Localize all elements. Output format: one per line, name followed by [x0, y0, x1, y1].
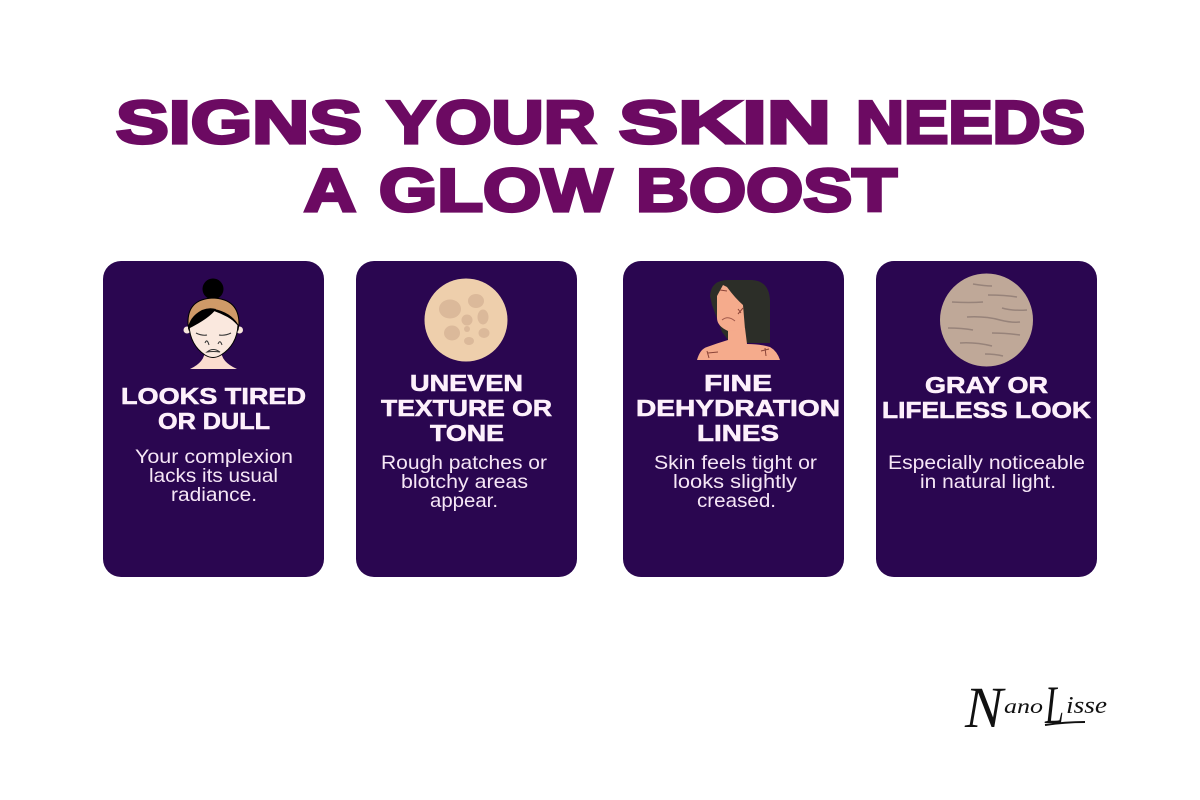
- title: [116, 89, 1085, 224]
- text block: [654, 452, 818, 512]
- heading: LIFELESS LOOK: [882, 397, 1091, 423]
- logo: NanoLisse signature: [964, 675, 1107, 740]
- heading: GRAY OR: [925, 372, 1048, 398]
- title: A: [304, 157, 356, 224]
- text block: [381, 452, 548, 512]
- title: NEEDS: [856, 89, 1085, 156]
- heading: UNEVEN: [410, 370, 523, 396]
- heading: [882, 372, 1091, 423]
- text block: appear.: [430, 490, 498, 512]
- icon: skin patches: [424, 278, 508, 362]
- text block: Rough patches or: [381, 452, 548, 474]
- icon: woman with dry skin: [697, 280, 780, 360]
- heading: [636, 370, 840, 446]
- text block: Skin feels tight or: [654, 452, 818, 474]
- logo: NanoLisse signature: L: [1044, 675, 1064, 735]
- title: BOOST: [636, 157, 897, 224]
- title: SKIN: [619, 89, 831, 156]
- icon: dull skin circle: [940, 274, 1033, 366]
- text block: looks slightly: [673, 471, 797, 493]
- heading: LINES: [697, 420, 779, 446]
- title: GLOW: [379, 157, 612, 224]
- title: YOUR: [387, 89, 596, 156]
- panel: gray or lifeless look: [876, 261, 1097, 577]
- text block: [888, 452, 1085, 493]
- title: SIGNS: [116, 89, 362, 156]
- panel: looks tired or dull: [103, 261, 324, 577]
- text block: [135, 446, 293, 506]
- logo: NanoLisse signature: isse: [1066, 693, 1107, 719]
- heading: DEHYDRATION: [636, 395, 840, 421]
- text block: Especially noticeable: [888, 452, 1085, 474]
- text block: blotchy areas: [401, 471, 528, 493]
- heading: TONE: [430, 420, 504, 446]
- panel: uneven texture or tone: [356, 261, 577, 577]
- heading: FINE: [704, 370, 772, 396]
- text block: lacks its usual: [149, 465, 278, 487]
- heading: [121, 383, 306, 434]
- icon: tired face: [184, 278, 243, 369]
- text block: creased.: [697, 490, 776, 512]
- text block: in natural light.: [920, 471, 1056, 493]
- heading: [381, 370, 552, 446]
- logo: NanoLisse signature: ano: [1004, 694, 1043, 718]
- panel: fine dehydration lines: [623, 261, 844, 577]
- heading: LOOKS TIRED: [121, 383, 306, 409]
- heading: OR DULL: [158, 408, 270, 434]
- text block: radiance.: [171, 484, 257, 506]
- text block: Your complexion: [135, 446, 293, 468]
- logo: NanoLisse signature: N: [964, 675, 1006, 740]
- heading: TEXTURE OR: [381, 395, 552, 421]
